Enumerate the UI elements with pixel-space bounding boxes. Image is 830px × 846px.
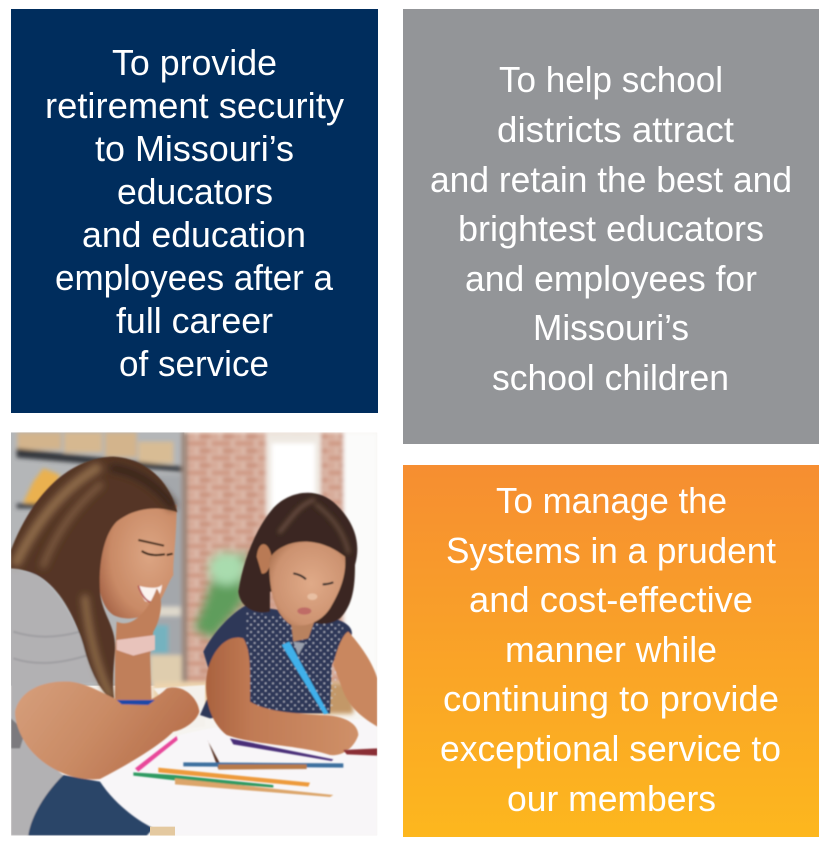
photo: edge of table base xyxy=(150,827,175,836)
text: attract and retain mission xyxy=(430,59,792,398)
text: attract and retain mission: districts attract xyxy=(497,109,734,150)
text: prudent management mission: manner while xyxy=(505,629,717,670)
photo background: shelves, brick wall and window xyxy=(11,432,377,836)
photo: child xyxy=(200,493,377,755)
text: retirement security mission: To provide xyxy=(112,42,277,83)
woman shirt xyxy=(11,570,100,836)
panel: gray attract and retain xyxy=(403,9,819,444)
text: retirement security mission: and education xyxy=(82,214,306,255)
text: prudent management mission: our members xyxy=(507,778,716,819)
text: attract and retain mission: and retain the best and xyxy=(430,159,792,200)
text: retirement security mission: of service xyxy=(119,343,269,384)
woman arm xyxy=(15,681,199,779)
child blue pen xyxy=(282,642,328,714)
text: retirement security mission: educators xyxy=(117,171,273,212)
text: attract and retain mission: Missouri’s xyxy=(533,307,689,348)
photo: woman xyxy=(11,457,199,836)
woman face xyxy=(98,502,177,618)
text: prudent management mission: Systems in a prudent xyxy=(446,530,776,571)
panel: navy retirement security xyxy=(11,9,378,413)
text: retirement security mission: employees after a xyxy=(55,257,334,298)
text: retirement security mission: full career xyxy=(116,300,273,341)
woman hair highlights xyxy=(17,468,172,695)
child hair highlights xyxy=(280,500,348,552)
photo: table with paper xyxy=(154,684,206,717)
text: prudent management mission: continuing to provide xyxy=(443,678,779,719)
text: attract and retain mission: school children xyxy=(492,357,729,398)
child dress xyxy=(200,605,352,718)
text: attract and retain mission: and employees for xyxy=(465,258,757,299)
child face and neck xyxy=(290,622,315,642)
photo background: plant xyxy=(193,552,247,638)
text: prudent management mission: and cost-effective xyxy=(469,579,753,620)
text: retirement security mission: to Missouri’s xyxy=(95,128,294,169)
text: retirement security mission xyxy=(45,42,344,384)
text: attract and retain mission: brightest educators xyxy=(458,208,764,249)
text: prudent management mission: exceptional service to xyxy=(440,728,781,769)
photo: teacher and child drawing at a table xyxy=(11,432,377,836)
text: prudent management mission xyxy=(440,480,781,819)
text: retirement security mission: retirement security xyxy=(45,85,344,126)
woman hair xyxy=(11,457,177,702)
woman hand and forearm xyxy=(115,588,161,702)
text: attract and retain mission: To help school xyxy=(499,59,723,100)
woman jeans xyxy=(27,775,153,836)
child ear xyxy=(257,544,272,574)
photo: pencils on table xyxy=(133,736,377,797)
panel: orange prudent management xyxy=(403,465,819,837)
child hair xyxy=(238,493,357,624)
text: prudent management mission: To manage the xyxy=(496,480,727,521)
child arms xyxy=(206,638,358,755)
